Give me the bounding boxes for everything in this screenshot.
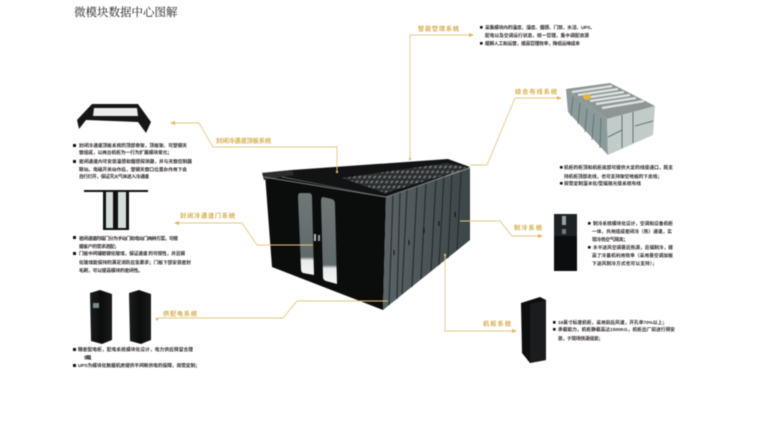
text: management notes: 采集模块内的温度、湿度、烟感、门禁、水浸、UPS、 (485, 24, 595, 31)
leader: power distribution: 供配电系统 (163, 310, 198, 318)
leader: smart management: 智能管理系统 (418, 25, 460, 33)
leader: cooling (460, 221, 543, 238)
icon: ceiling assembly (77, 104, 151, 133)
unit roof (262, 159, 470, 197)
leader: cabinet (444, 254, 517, 333)
text: cabinet notes: 19英寸标准机柜，采用前后风道，开孔率70%以上； (558, 319, 667, 326)
text: cooling notes: 下送风制冷方式也可以支持）； (592, 260, 657, 267)
text: power notes: 精密配电柜，配电系统模块化设计，电力供应预留合理 (78, 346, 193, 353)
leader: cabinet: 机柜系统 (483, 320, 512, 328)
text: management notes: 配电以及空调运行状态，统一管理，集中调配资源 (485, 32, 589, 39)
text: ceiling notes: 自行打开，保证灭火气体进入冷通道 (79, 173, 149, 180)
leader: integrated cabling: 综合布线系统 (515, 88, 558, 96)
text: ceiling notes: 封闭冷通道顶板系统的顶部骨架，顶板架、可塑钢天 (79, 142, 187, 149)
text: cabinet notes: 装，于现场快速组装； (558, 335, 603, 342)
icon: white module (566, 83, 655, 155)
text: cabinet notes: 承载能力，机柜静载高达1500KG，机柜出厂前进行预安 (558, 326, 675, 333)
text: power notes: 余量； (84, 354, 94, 361)
text: door notes: 门板中间镶嵌钢化玻璃，保证通道 的可视性，并且钢 (79, 250, 185, 257)
leader: sealed aisle door (174, 212, 313, 245)
text: power notes (73, 346, 200, 369)
text: cooling notes: 制冷系统模块化设计，空调和设备机柜 (593, 220, 673, 227)
text: cabling notes (560, 164, 673, 187)
text: cabling notes: 按需定制湿冰化/型端接光缆系统布线 (564, 180, 641, 187)
leader: cooling: 制冷系统 (514, 224, 543, 232)
leader: sealed aisle ceiling: 封闭冷通道顶板系统 (216, 137, 272, 145)
leader: integrated cabling (470, 88, 562, 165)
text: door notes: 据客户的需求选配； (79, 243, 119, 250)
text: ceiling notes: 联动。电磁开关动作后，塑钢天窗口位置办作用下会 (79, 166, 187, 173)
text: cooling notes (588, 220, 673, 267)
icon: server cabinet (521, 297, 546, 363)
icon: aisle door (84, 190, 148, 230)
text: cooling notes: 水平送风空调靠近热源，近端制冷，提 (593, 244, 673, 251)
unit doors (298, 193, 337, 284)
leader: sealed aisle ceiling (170, 121, 338, 173)
leader: sealed aisle door: 封闭冷通道门系统 (180, 212, 236, 220)
text: cabling notes: 机柜的柜顶和机柜底部可提供大定的线缆通口，既支 (564, 164, 673, 171)
icon: power cabinets (90, 290, 151, 344)
leader: smart management (409, 25, 474, 160)
text: management notes: 缓解人工和运营，提高管理效率，降低运维成本 (485, 40, 580, 47)
text: cabling notes: 持机柜顶部走线，也可支持架空地板的下走线； (564, 173, 662, 180)
text: door notes: 化玻璃能保持的满足消防应急要求；门板下部安装密封 (79, 259, 191, 266)
text: ceiling notes: 窗组成，以两台机柜为一行为扩展模块单元； (79, 149, 172, 156)
text: management notes (480, 24, 595, 47)
text: cooling notes: 高了冷量机利用效率（采用靠空调加板 (592, 252, 673, 259)
text: cooling notes: 一体，共用组成密闭冷（热）通道，实 (592, 228, 672, 235)
text: ceiling notes: 密闭通道内可安装温感和烟感探测器，并与天窗控制器 (79, 158, 192, 165)
leader: power distribution (156, 301, 388, 320)
text: ceiling notes (73, 142, 192, 180)
icon: cooling unit (554, 214, 577, 271)
unit side face with panels (383, 168, 470, 310)
text: door notes: 毛刷，可以提高模块的密闭性。 (79, 267, 143, 274)
text: door notes: 密闭通道的端门分为手动门和电动门两种方案，可根 (79, 235, 178, 242)
main micro-module unit (262, 159, 470, 310)
title: 微模块数据中心图解 (74, 5, 178, 19)
text: cabinet notes (553, 319, 675, 342)
unit front face (265, 174, 386, 310)
text: cooling notes: 现冷热空气隔离； (592, 236, 628, 243)
text: door notes (73, 235, 191, 274)
text: power notes: UPS为模块化数据机房提供不间断供电的保障，按需定制； (78, 362, 200, 369)
